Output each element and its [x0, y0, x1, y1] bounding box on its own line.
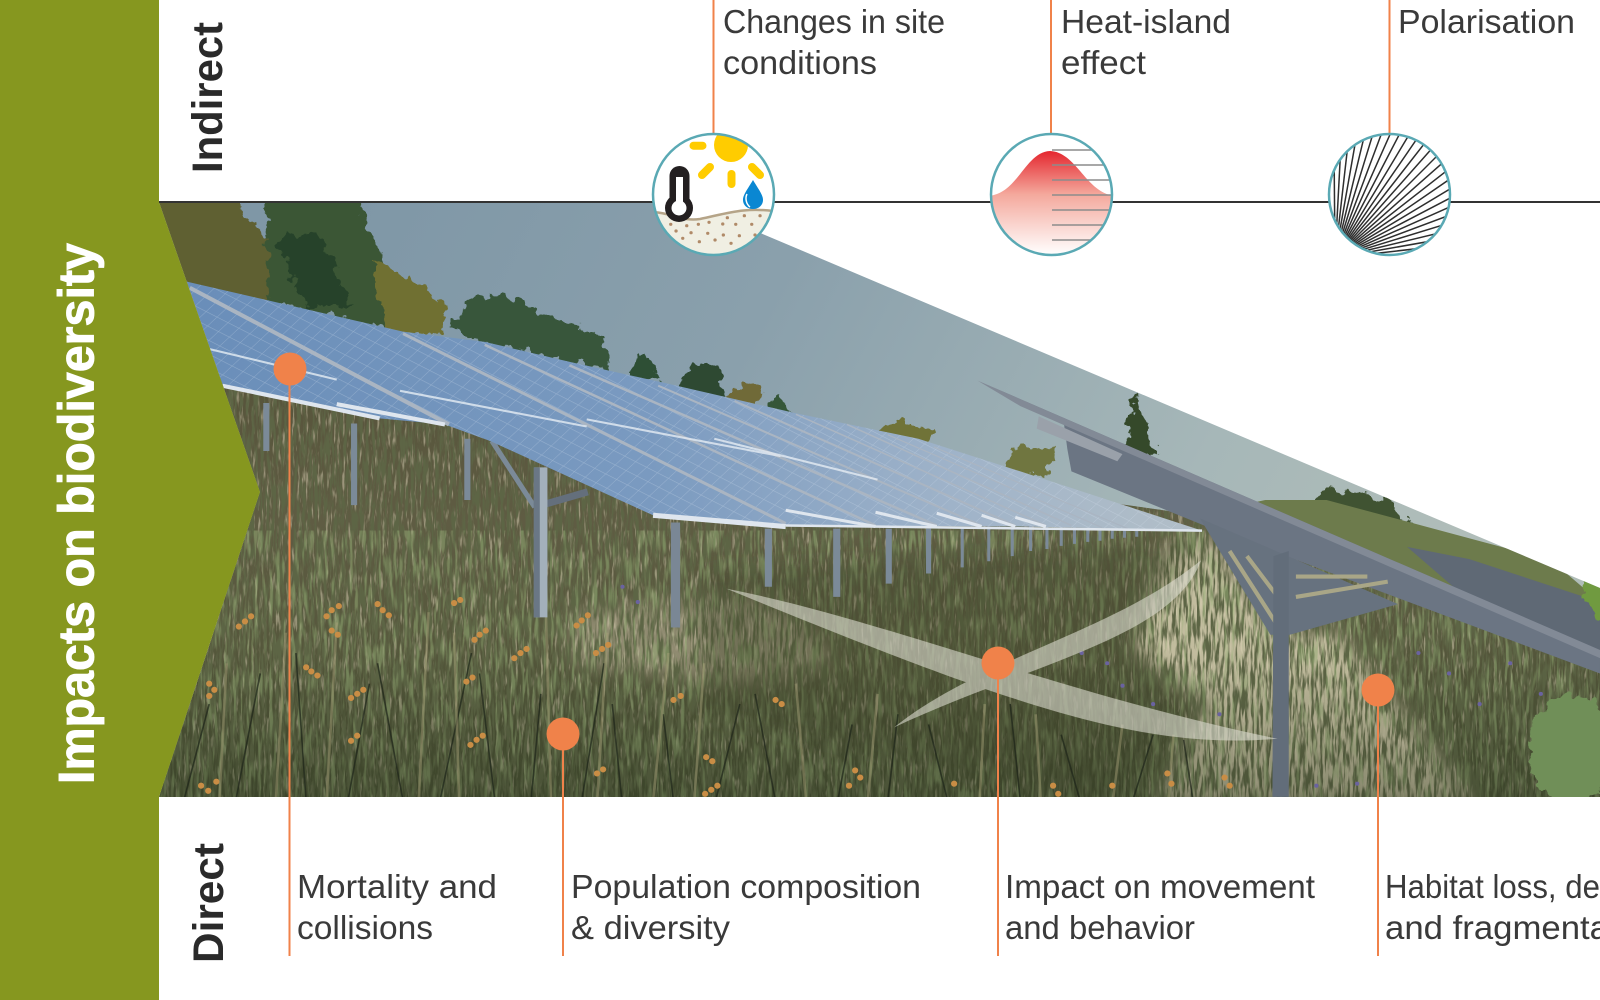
label: Changes in site — [723, 3, 945, 40]
icon: sun, thermometer, water drop and soil — [652, 132, 776, 256]
orange flowers — [201, 600, 1230, 794]
category label: indirect: Indirect — [184, 22, 232, 173]
label: Population composition — [571, 868, 921, 905]
label: Impact on movement — [1005, 868, 1315, 905]
leader line — [1050, 0, 1052, 134]
meadow — [153, 367, 1600, 806]
icon: heat bell curve — [988, 134, 1120, 260]
leader line — [1388, 0, 1390, 134]
label: collisions — [297, 909, 433, 946]
green side banner with arrow point — [0, 0, 260, 1000]
marker dot and leader — [274, 352, 306, 956]
direct item: population composition and diversity — [546, 718, 921, 956]
marker dot and leader — [546, 718, 580, 956]
label: Heat-island — [1061, 3, 1231, 40]
label: Mortality and — [297, 868, 497, 905]
label: Polarisation — [1398, 3, 1575, 40]
indirect item: heat-island effect — [988, 0, 1231, 260]
indirect item: polarisation — [1329, 0, 1575, 258]
icon: polarised light rays — [1328, 132, 1452, 256]
solar panel rows — [187, 282, 1202, 531]
foreground grey solar row — [978, 381, 1600, 797]
purple flowers — [622, 587, 1541, 786]
direct item: habitat loss, degradation and fragmentation — [1362, 674, 1600, 956]
crossed wing blades — [727, 560, 1278, 741]
banner title: Impacts on biodiversity — [48, 243, 104, 784]
bushes — [1528, 580, 1600, 797]
direct item: mortality and collisions — [274, 352, 497, 956]
label: effect — [1061, 44, 1146, 81]
meadow texture — [153, 367, 1600, 806]
distant forest — [160, 203, 1414, 524]
label: conditions — [723, 44, 877, 81]
support posts — [266, 403, 1137, 628]
indirect item: changes in site conditions — [650, 0, 945, 260]
dirt path — [571, 536, 1480, 806]
leader line — [712, 0, 714, 134]
marker dot and leader — [1362, 674, 1394, 956]
category label: direct: Direct — [185, 843, 233, 963]
photo: solar park in a meadow — [153, 194, 1600, 806]
plant stalks — [184, 612, 1194, 806]
sky — [153, 194, 1600, 602]
label: & diversity — [571, 909, 731, 946]
marker dot and leader — [982, 646, 1014, 956]
direct item: impact on movement and behavior — [982, 646, 1315, 956]
horizontal axis line — [159, 201, 1600, 203]
label: and behavior — [1005, 909, 1195, 946]
green hill — [1258, 500, 1586, 596]
